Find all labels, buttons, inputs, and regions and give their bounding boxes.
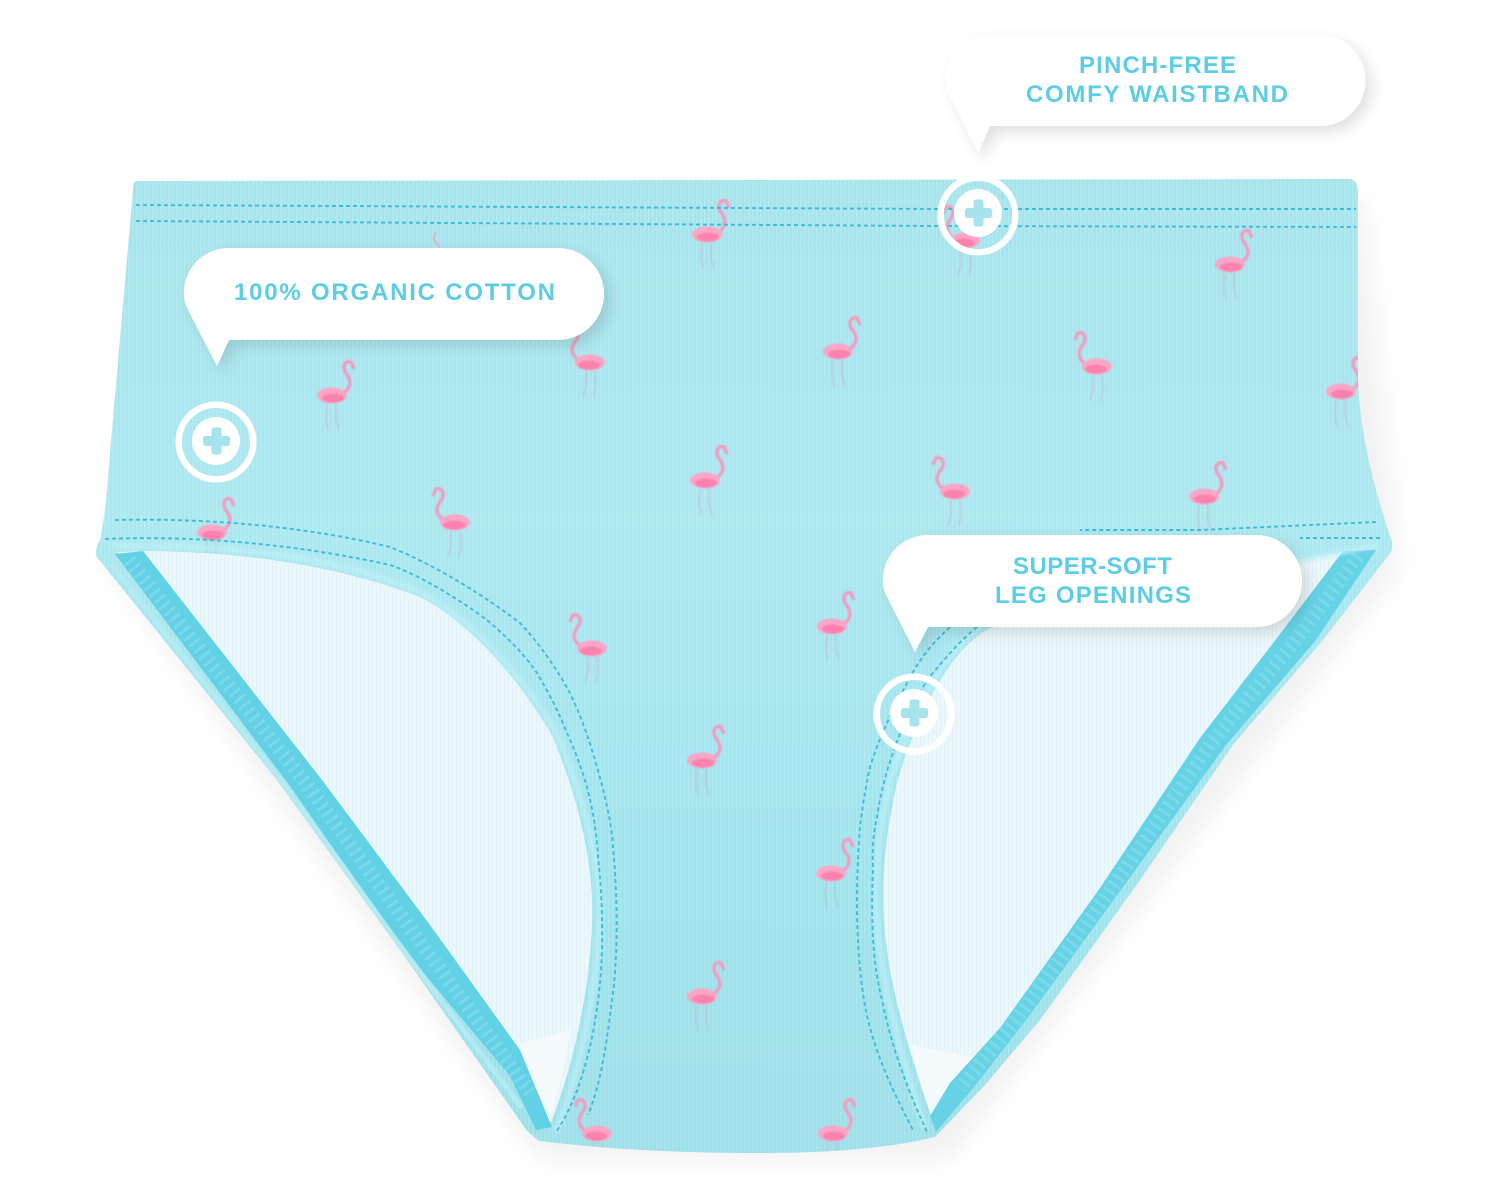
bubble shape xyxy=(184,248,604,366)
leg seam edges xyxy=(112,545,1378,1132)
bubble shape xyxy=(946,35,1366,153)
icon: cotton hotspot xyxy=(179,405,253,479)
right leg opening xyxy=(883,550,1376,1132)
label text xyxy=(1026,52,1288,108)
soft garment shadow xyxy=(110,200,1400,1160)
fabric body xyxy=(96,179,1392,1153)
bubble shape xyxy=(883,535,1302,652)
flamingo print pattern xyxy=(197,201,1363,1168)
right elastic rim xyxy=(930,550,1376,1132)
label text: SUPER-SOFT xyxy=(1013,553,1172,580)
label text: COMFY WAISTBAND xyxy=(1026,81,1288,108)
label text xyxy=(995,553,1191,609)
icon: waistband hotspot xyxy=(941,178,1015,252)
label text: LEG OPENINGS xyxy=(995,582,1191,609)
callout: 100% organic cotton xyxy=(184,248,604,366)
right gusset fold xyxy=(911,1045,975,1118)
label text: PINCH-FREE xyxy=(1079,52,1236,79)
inner gusset fold xyxy=(507,1030,570,1122)
callout: pinch-free comfy waistband xyxy=(946,35,1366,153)
callout: super-soft leg openings xyxy=(883,535,1302,652)
icon: leg opening hotspot xyxy=(877,677,951,751)
left leg opening xyxy=(111,551,592,1130)
left elastic rim xyxy=(115,551,552,1130)
label text: 100% ORGANIC COTTON xyxy=(234,279,555,306)
stitching lines xyxy=(105,205,1380,1132)
garment: flamingo print briefs xyxy=(96,179,1400,1168)
